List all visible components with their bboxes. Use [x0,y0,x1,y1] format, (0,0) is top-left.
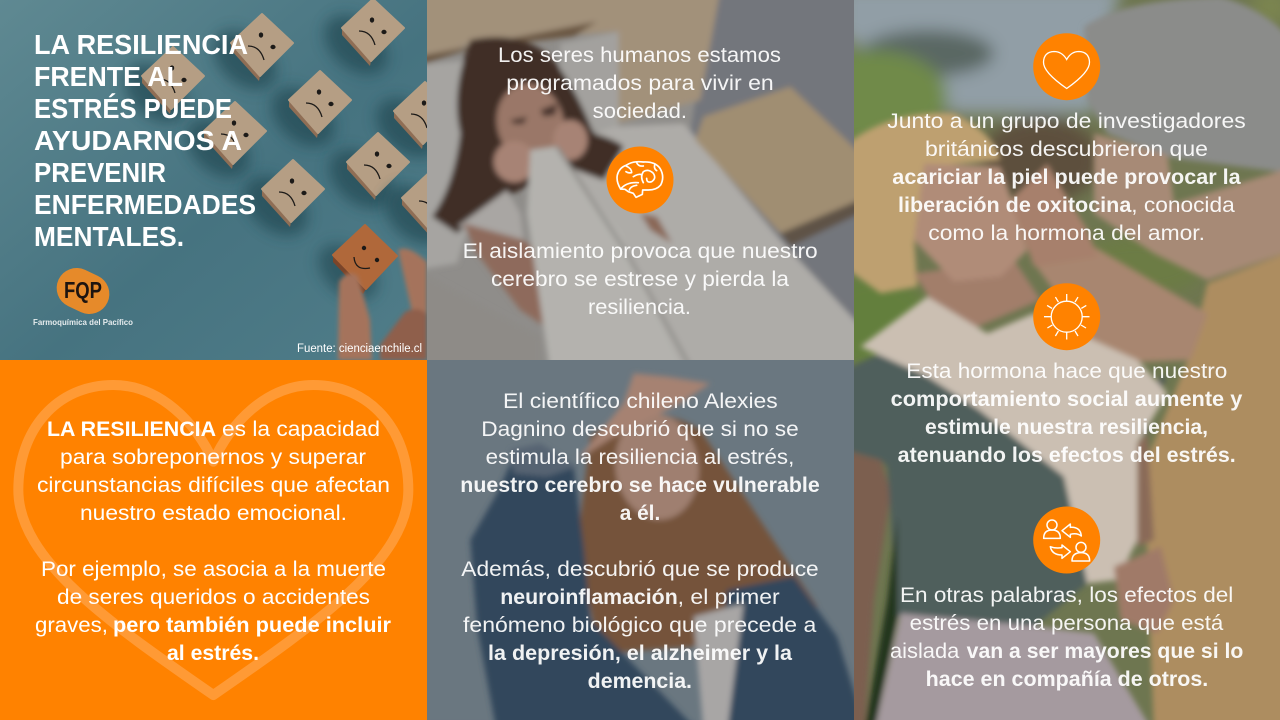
text: isolation [464,242,817,314]
text: definition [37,418,390,525]
title: ESTRÉS PUEDE [34,93,232,124]
text: Dagnino discovery: a él. [620,502,660,525]
text: in other words: van a ser mayores que si lo [967,640,1243,663]
text: isolation: resiliencia. [588,296,691,319]
text: hormone: atenuando los efectos del estrés. [898,444,1236,467]
logo: FQP [34,268,133,326]
panel: title photo [0,0,464,360]
orange smiling cube [314,224,398,302]
source credit: Fuente: cienciaenchile.cl [297,343,422,355]
title: AYUDARNOS A [34,125,242,156]
text: researchers: como la hormona del amor. [928,222,1205,245]
text: Dagnino discovery: estimula la resiliencia al estrés, [486,446,794,469]
panel: definition [0,360,427,720]
text: hormone: Esta hormona hace que nuestro [906,360,1227,383]
text: researchers: , conocida [1131,194,1235,217]
text: Dagnino discovery: El científico chileno Alexies [503,390,778,413]
text: in other words [890,584,1243,691]
text: neuroinflammation: Además, descubrió que se produce [461,558,819,581]
text: in other words: aislada [890,640,960,663]
large heart outline [18,385,408,695]
text: Dagnino discovery: nuestro cerebro se hace vulnerable [460,474,820,497]
text: hormone: comportamiento social aumente y [891,388,1243,411]
text: humans [500,46,780,118]
text: example: al estrés. [167,642,259,665]
orange background [0,360,427,720]
text: humans: programados para vivir en [506,72,774,95]
text: Dagnino discovery: Dagnino descubrió que si no se [481,418,799,441]
text: researchers: británicos descubrieron que [925,138,1208,161]
text: in other words: estrés en una persona que está [910,612,1224,635]
panel: isolation [417,0,867,373]
wooden cubes with sad faces [120,0,427,249]
text: researchers: acariciar la piel puede provocar la [892,166,1241,189]
text: isolation: cerebro se estrese y pierda la [491,268,789,291]
fingers holding the cube [338,248,427,360]
text: example: pero también puede incluir [113,614,391,637]
text: in other words: En otras palabras, los efectos del [900,584,1233,607]
text: isolation: El aislamiento provoca que nuestro [463,240,818,263]
photo: couple outdoors [854,0,1280,720]
logo: FQP: FQP [64,277,102,303]
text: example: Por ejemplo, se asocia a la muerte [41,558,386,581]
title: ENFERMEDADES [34,189,256,220]
text: humans: Los seres humanos estamos [498,44,781,67]
text: definition: para sobreponernos y superar [60,446,366,469]
text: researchers: liberación de oxitocina [898,194,1132,217]
text: neuroinflammation: fenómeno biológico que precede a [463,614,817,637]
text: example: graves, [35,614,108,637]
text: humans: sociedad. [593,100,687,123]
panel: couple [854,0,1280,720]
text: neuroinflammation: neuroinflamación [500,586,678,609]
icon: sun [1033,283,1100,350]
text: example: de seres queridos o accidentes [57,586,370,609]
photo: woman in denim jacket [427,360,867,720]
text: researchers [887,110,1246,245]
text: neuroinflammation: demencia. [588,670,692,693]
text: Dagnino discovery [460,390,820,525]
text: neuroinflammation: , el primer [678,586,780,609]
panel: scientist [427,360,867,720]
title: FRENTE AL [34,61,183,92]
icon: brain [606,146,674,214]
title: MENTALES. [34,221,184,252]
photo background: teal surface [0,0,427,360]
text: definition: circunstancias difíciles que afectan [37,474,390,497]
text: definition: es la capacidad [222,418,380,441]
text: definition: LA RESILIENCIA [47,418,216,441]
text: definition: nuestro estado emocional. [80,502,347,525]
title: LA RESILIENCIA [34,29,248,60]
text: neuroinflammation [461,558,819,693]
text: hormone: estimule nuestra resiliencia, [925,416,1208,439]
title: PREVENIR [34,157,166,188]
logo: FQP: Farmoquímica del Pacífico [33,318,133,327]
icon: heart [1033,33,1100,100]
text: hormone [891,360,1243,467]
photo: woman in bed [417,0,867,373]
text: researchers: Junto a un grupo de investigadores [887,110,1246,133]
icon: people exchanging [1033,506,1100,574]
text: in other words: hace en compañía de otros. [926,668,1208,691]
text: example [35,558,391,665]
text: neuroinflammation: la depresión, el alzheimer y la [488,642,792,665]
title [34,29,256,252]
